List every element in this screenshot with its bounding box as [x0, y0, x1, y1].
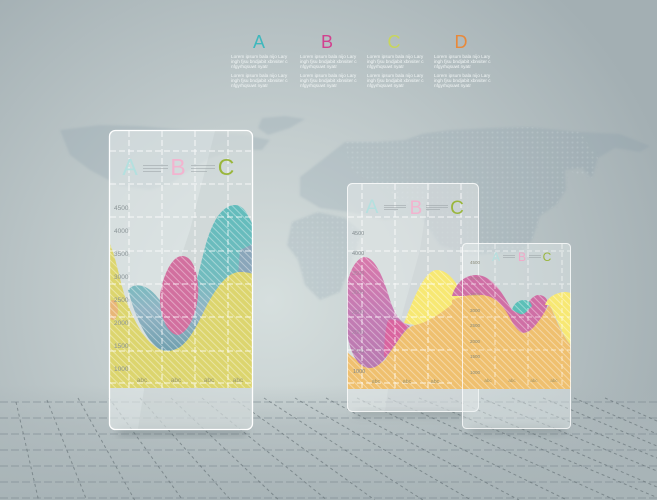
panel border [348, 184, 478, 412]
panel grid [348, 184, 478, 388]
y axis labels: 2000 [352, 330, 364, 336]
legend column B: nfgyrhqsuwt nyatr [300, 83, 337, 88]
y axis labels: 2000 [114, 320, 129, 327]
legend column C: nfgyrhqsuwt nyatr [367, 64, 404, 69]
y axis labels [352, 231, 365, 375]
legend column B: ingh fjsu bndjabit xbnsiter c [300, 78, 357, 83]
y axis labels: 2000 [470, 339, 481, 344]
legend column C: Lorem ipsum bala nijo Lary [367, 73, 424, 78]
x axis labels [484, 378, 558, 383]
legend column B: Lorem ipsum bala nijo Lary [300, 54, 357, 59]
x axis labels: abc [372, 379, 381, 385]
legend column C: nfgyrhqsuwt nyatr [367, 83, 404, 88]
y axis labels: 1500 [114, 343, 129, 350]
legend column A: Lorem ipsum bala nijo Lary [231, 54, 288, 59]
x axis labels: abc [484, 378, 492, 383]
y axis labels: 4500 [470, 260, 481, 265]
y axis labels: 1000 [470, 370, 481, 375]
x axis labels: abc [403, 379, 412, 385]
legend column A: nfgyrhqsuwt nyatr [231, 64, 268, 69]
panel grid [463, 244, 570, 385]
panel: middle glass chart [347, 183, 479, 412]
panel legend: C [218, 154, 234, 180]
y axis labels: 3000 [352, 290, 364, 296]
area chart [347, 257, 464, 389]
y axis labels: 4500 [352, 231, 364, 237]
y axis labels: 4500 [114, 205, 129, 212]
floor grid [0, 385, 657, 500]
header legend [231, 32, 491, 88]
y axis labels: 3500 [470, 292, 481, 297]
legend column D: Lorem ipsum bala nijo Lary [434, 73, 491, 78]
y axis labels: 1000 [114, 366, 129, 373]
x axis labels: abc [171, 377, 182, 384]
x axis labels: abc [550, 378, 558, 383]
legend column C: ingh fjsu bndjabit xbnsiter c [367, 78, 424, 83]
y axis labels: 2500 [114, 297, 129, 304]
y axis labels: 3500 [114, 251, 129, 258]
y axis labels: 2500 [470, 323, 481, 328]
legend column A [231, 32, 288, 88]
legend column B: ingh fjsu bndjabit xbnsiter c [300, 59, 357, 64]
legend column D: ingh fjsu bndjabit xbnsiter c [434, 59, 491, 64]
panel legend: B [410, 198, 422, 219]
legend column A: ingh fjsu bndjabit xbnsiter c [231, 78, 288, 83]
legend column D: nfgyrhqsuwt nyatr [434, 64, 471, 69]
x axis labels: abc [530, 378, 538, 383]
y axis labels: 2500 [352, 310, 364, 316]
x axis labels: abc [431, 379, 440, 385]
panel legend [366, 197, 464, 219]
legend column B: nfgyrhqsuwt nyatr [300, 64, 337, 69]
x axis labels: abc [204, 377, 215, 384]
y axis labels: 4000 [470, 276, 481, 281]
legend column B [300, 32, 357, 88]
panel legend: A [492, 250, 500, 264]
y axis labels: 1500 [352, 349, 364, 355]
x axis labels: abc [508, 378, 516, 383]
x axis labels [137, 377, 244, 384]
legend column D: nfgyrhqsuwt nyatr [434, 83, 471, 88]
y axis labels: 4000 [114, 228, 129, 235]
panel legend [122, 154, 234, 180]
x axis labels: abc [233, 377, 244, 384]
panel legend: C [543, 250, 552, 264]
y axis labels: 3000 [114, 274, 129, 281]
legend column A: A [253, 32, 265, 52]
panel legend: B [170, 154, 186, 180]
x axis labels: abc [456, 379, 465, 385]
panel border [462, 244, 570, 428]
panel border [110, 130, 252, 430]
panel legend: C [450, 198, 464, 219]
panel legend: B [518, 250, 526, 264]
panel grid [110, 131, 252, 388]
y axis labels [470, 260, 481, 375]
x axis labels [372, 379, 465, 385]
legend column C [367, 32, 424, 88]
panel: right glass chart [452, 243, 571, 429]
y axis labels: 1500 [470, 354, 481, 359]
legend column A: Lorem ipsum bala nijo Lary [231, 73, 288, 78]
y axis labels: 4000 [352, 251, 364, 257]
panel legend [492, 250, 552, 264]
legend column D: ingh fjsu bndjabit xbnsiter c [434, 78, 491, 83]
panel legend: A [366, 197, 379, 218]
legend column C: C [388, 32, 400, 52]
y axis labels: 3000 [470, 308, 481, 313]
legend column D [434, 32, 491, 88]
y axis labels: 3500 [352, 271, 364, 277]
area chart [110, 205, 252, 388]
panel legend: A [122, 154, 138, 180]
panel shadows [118, 410, 565, 436]
world map [60, 116, 650, 300]
x axis labels: abc [137, 377, 148, 384]
legend column C: Lorem ipsum bala nijo Lary [367, 54, 424, 59]
legend column D: Lorem ipsum bala nijo Lary [434, 54, 491, 59]
legend column B: B [321, 32, 333, 52]
legend column D: D [454, 32, 468, 52]
legend column B: Lorem ipsum bala nijo Lary [300, 73, 357, 78]
area chart [452, 275, 571, 389]
y axis labels [114, 205, 129, 373]
legend column C: ingh fjsu bndjabit xbnsiter c [367, 59, 424, 64]
y axis labels: 1000 [353, 369, 365, 375]
legend column A: ingh fjsu bndjabit xbnsiter c [231, 59, 288, 64]
panel: left glass chart [108, 130, 253, 430]
legend column A: nfgyrhqsuwt nyatr [231, 83, 268, 88]
